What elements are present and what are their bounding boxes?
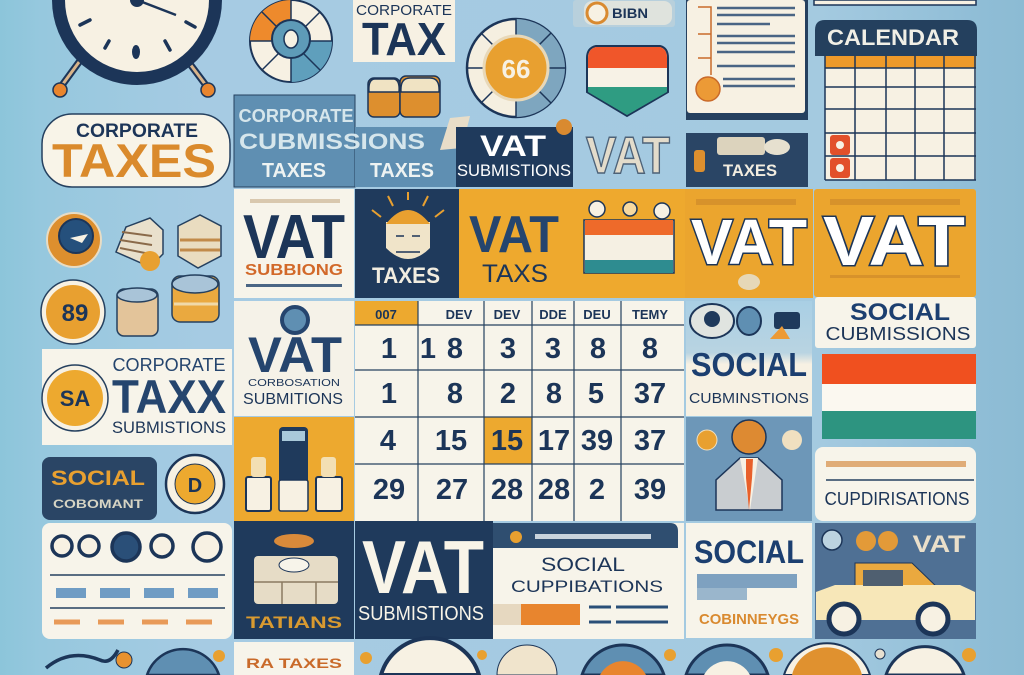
calendar: main: 28 (491, 474, 523, 506)
icon: segmented donut (250, 0, 332, 82)
panel: corporate tax submissions: SUBMISTIONS (112, 418, 226, 437)
text: taxes: TAXES (370, 160, 434, 182)
panel: VAT orange: VAT (691, 206, 807, 278)
panel: VAT submissions: SUBBIONG (245, 262, 343, 279)
calendar: main: 8 (447, 378, 463, 410)
card: social cubmisations: SOCIAL (850, 299, 950, 326)
card: corporate tax: CORPORATE (356, 2, 452, 19)
card: corporate tax: TAX (362, 13, 446, 65)
panel: social label (42, 457, 157, 520)
icon: alarm clock (52, 0, 222, 97)
calendar: main: 2 (589, 474, 605, 506)
calendar: main: 1 (381, 333, 397, 365)
bottom row: partial icons: RA TAXES (246, 655, 342, 671)
label strip: top right (814, 0, 976, 5)
panel: VAT submissions (234, 189, 354, 298)
card: cubmisations (815, 447, 976, 521)
calendar: main: 37 (634, 378, 666, 410)
calendar: main: 3 (545, 333, 561, 365)
calendar: main: DDE (539, 307, 567, 322)
calendar: main: 1 (381, 378, 397, 410)
bottom row: partial icons (46, 638, 976, 675)
panel: VAT submissions dark: SUBMISTIONS (457, 161, 571, 180)
small label: top centre (573, 0, 675, 27)
panel: VAT taxes orange: VAT (469, 206, 559, 264)
calendar: main: 8 (546, 378, 562, 410)
calendar: main: 8 (642, 333, 658, 365)
calendar: main: DEV (494, 307, 521, 322)
pill: corporate taxes: TAXES (52, 134, 216, 187)
panel: taxes small (686, 133, 808, 187)
panel: VAT car: VAT (912, 531, 966, 558)
panel: social thumbnails: COBINNEYGS (699, 611, 799, 628)
calendar: main: DEU (583, 307, 611, 322)
calendar: main: 8 (447, 333, 463, 365)
panel: VAT submissions: VAT (243, 203, 345, 272)
calendar: main: 15 (491, 425, 523, 457)
icons: coin stacks: 89 (62, 300, 88, 327)
panel: VAT orange right: VAT (823, 202, 965, 280)
calendar: main: 4 (380, 425, 396, 457)
calendar: main: 15 (435, 425, 467, 457)
panel: corporate submissions taxes: CORPORATE (238, 106, 354, 126)
panel: social cuppibations (493, 523, 684, 639)
calendar: main: 39 (581, 425, 613, 457)
panel: VAT submissions dark (456, 119, 573, 187)
calendar: top right: CALENDAR (827, 25, 959, 50)
icon: dial badge (166, 455, 224, 513)
panel: corporate tax submissions: SA (60, 386, 90, 411)
panel: taxes icon (355, 189, 459, 298)
panel: corporate tax submissions: CORPORATE (112, 355, 226, 375)
panel: social thumbnails: SOCIAL (694, 534, 804, 570)
icons: coin stacks (41, 213, 221, 344)
panel: social thumbnails (686, 523, 812, 638)
panel: taxations (234, 521, 354, 639)
card: social cubmisations: CUBMISSIONS (826, 324, 970, 344)
pill: corporate taxes (42, 114, 230, 187)
calendar: main (355, 301, 684, 521)
panel: VAT orange right (814, 189, 976, 297)
panel: taxes icon: TAXES (372, 263, 440, 288)
small label: top centre: BIBN (612, 5, 648, 21)
calendar: main: 8 (590, 333, 606, 365)
panel: professional icons: SOCIAL (691, 346, 807, 383)
card: cubmisations: CUPDIRISATIONS (824, 489, 970, 509)
panel: professional icons: CUBMINSTIONS (689, 390, 809, 407)
icon: ring dial (467, 19, 565, 117)
card: corporate tax (353, 0, 455, 65)
icon: dial badge: D (188, 475, 202, 497)
panel: professional icons (686, 301, 812, 416)
panel: icon row (42, 523, 232, 639)
calendar: main: 17 (538, 425, 570, 457)
panel: VAT corporation submissions: VAT (248, 327, 342, 383)
panel: taxations: TATIANS (246, 613, 342, 632)
panel: social label: COBOMANT (53, 497, 144, 511)
panel: corporate submissions taxes (234, 95, 470, 187)
calendar: main: 007 (375, 307, 397, 322)
panel: VAT submissions large: VAT (362, 525, 484, 609)
panel: businessman (686, 417, 812, 521)
panel: orange device icons (234, 417, 354, 521)
calendar: top right (815, 20, 977, 180)
panel: social label: SOCIAL (51, 467, 145, 490)
panel: corporate submissions taxes: TAXES (262, 160, 326, 182)
calendar: main: 1 (420, 333, 436, 365)
panel: VAT taxes orange (459, 189, 685, 298)
calendar: main: 2 (500, 378, 516, 410)
panel: VAT light: VAT (586, 127, 670, 185)
panel: VAT submissions dark: VAT (480, 130, 546, 163)
card: social cubmisations (815, 297, 976, 348)
panel: VAT corporation submissions: SUBMITIONS (243, 391, 343, 408)
pill: corporate taxes: CORPORATE (76, 121, 198, 142)
panel: VAT orange (685, 189, 813, 298)
panel: social cuppibations: SOCIAL (541, 555, 625, 576)
panel: VAT submissions large (355, 521, 493, 639)
calendar: main: 5 (588, 378, 604, 410)
panel: corporate tax submissions (42, 349, 232, 445)
calendar: main: DEV (446, 307, 473, 322)
panel: taxes small: TAXES (723, 161, 777, 180)
calendar: main: 3 (500, 333, 516, 365)
calendar: main: 37 (634, 425, 666, 457)
calendar: main: 27 (436, 474, 468, 506)
flag: Hungary (822, 354, 976, 439)
icon: stacked coins (368, 76, 440, 117)
document with lines (686, 0, 808, 120)
card: flag (584, 201, 674, 273)
icon: ring dial: 66 (502, 54, 530, 84)
calendar: main: 28 (538, 474, 570, 506)
panel: corporate tax submissions: TAXX (112, 370, 226, 423)
panel: social cuppibations: CUPPIBATIONS (511, 577, 663, 596)
calendar: main: 29 (373, 474, 405, 506)
icon: Hungarian flag shield (587, 46, 668, 116)
panel: VAT submissions large: SUBMISTIONS (358, 603, 484, 625)
calendar: main: 39 (634, 474, 666, 506)
panel: VAT taxes orange: TAXS (482, 260, 548, 288)
panel: corporate submissions taxes: CUBMISSIONS (239, 129, 425, 154)
panel: VAT corporation submissions (234, 301, 354, 416)
panel: VAT car (815, 523, 976, 639)
panel: VAT corporation submissions: CORBOSATION (248, 378, 340, 389)
calendar: main: TEMY (632, 307, 668, 322)
